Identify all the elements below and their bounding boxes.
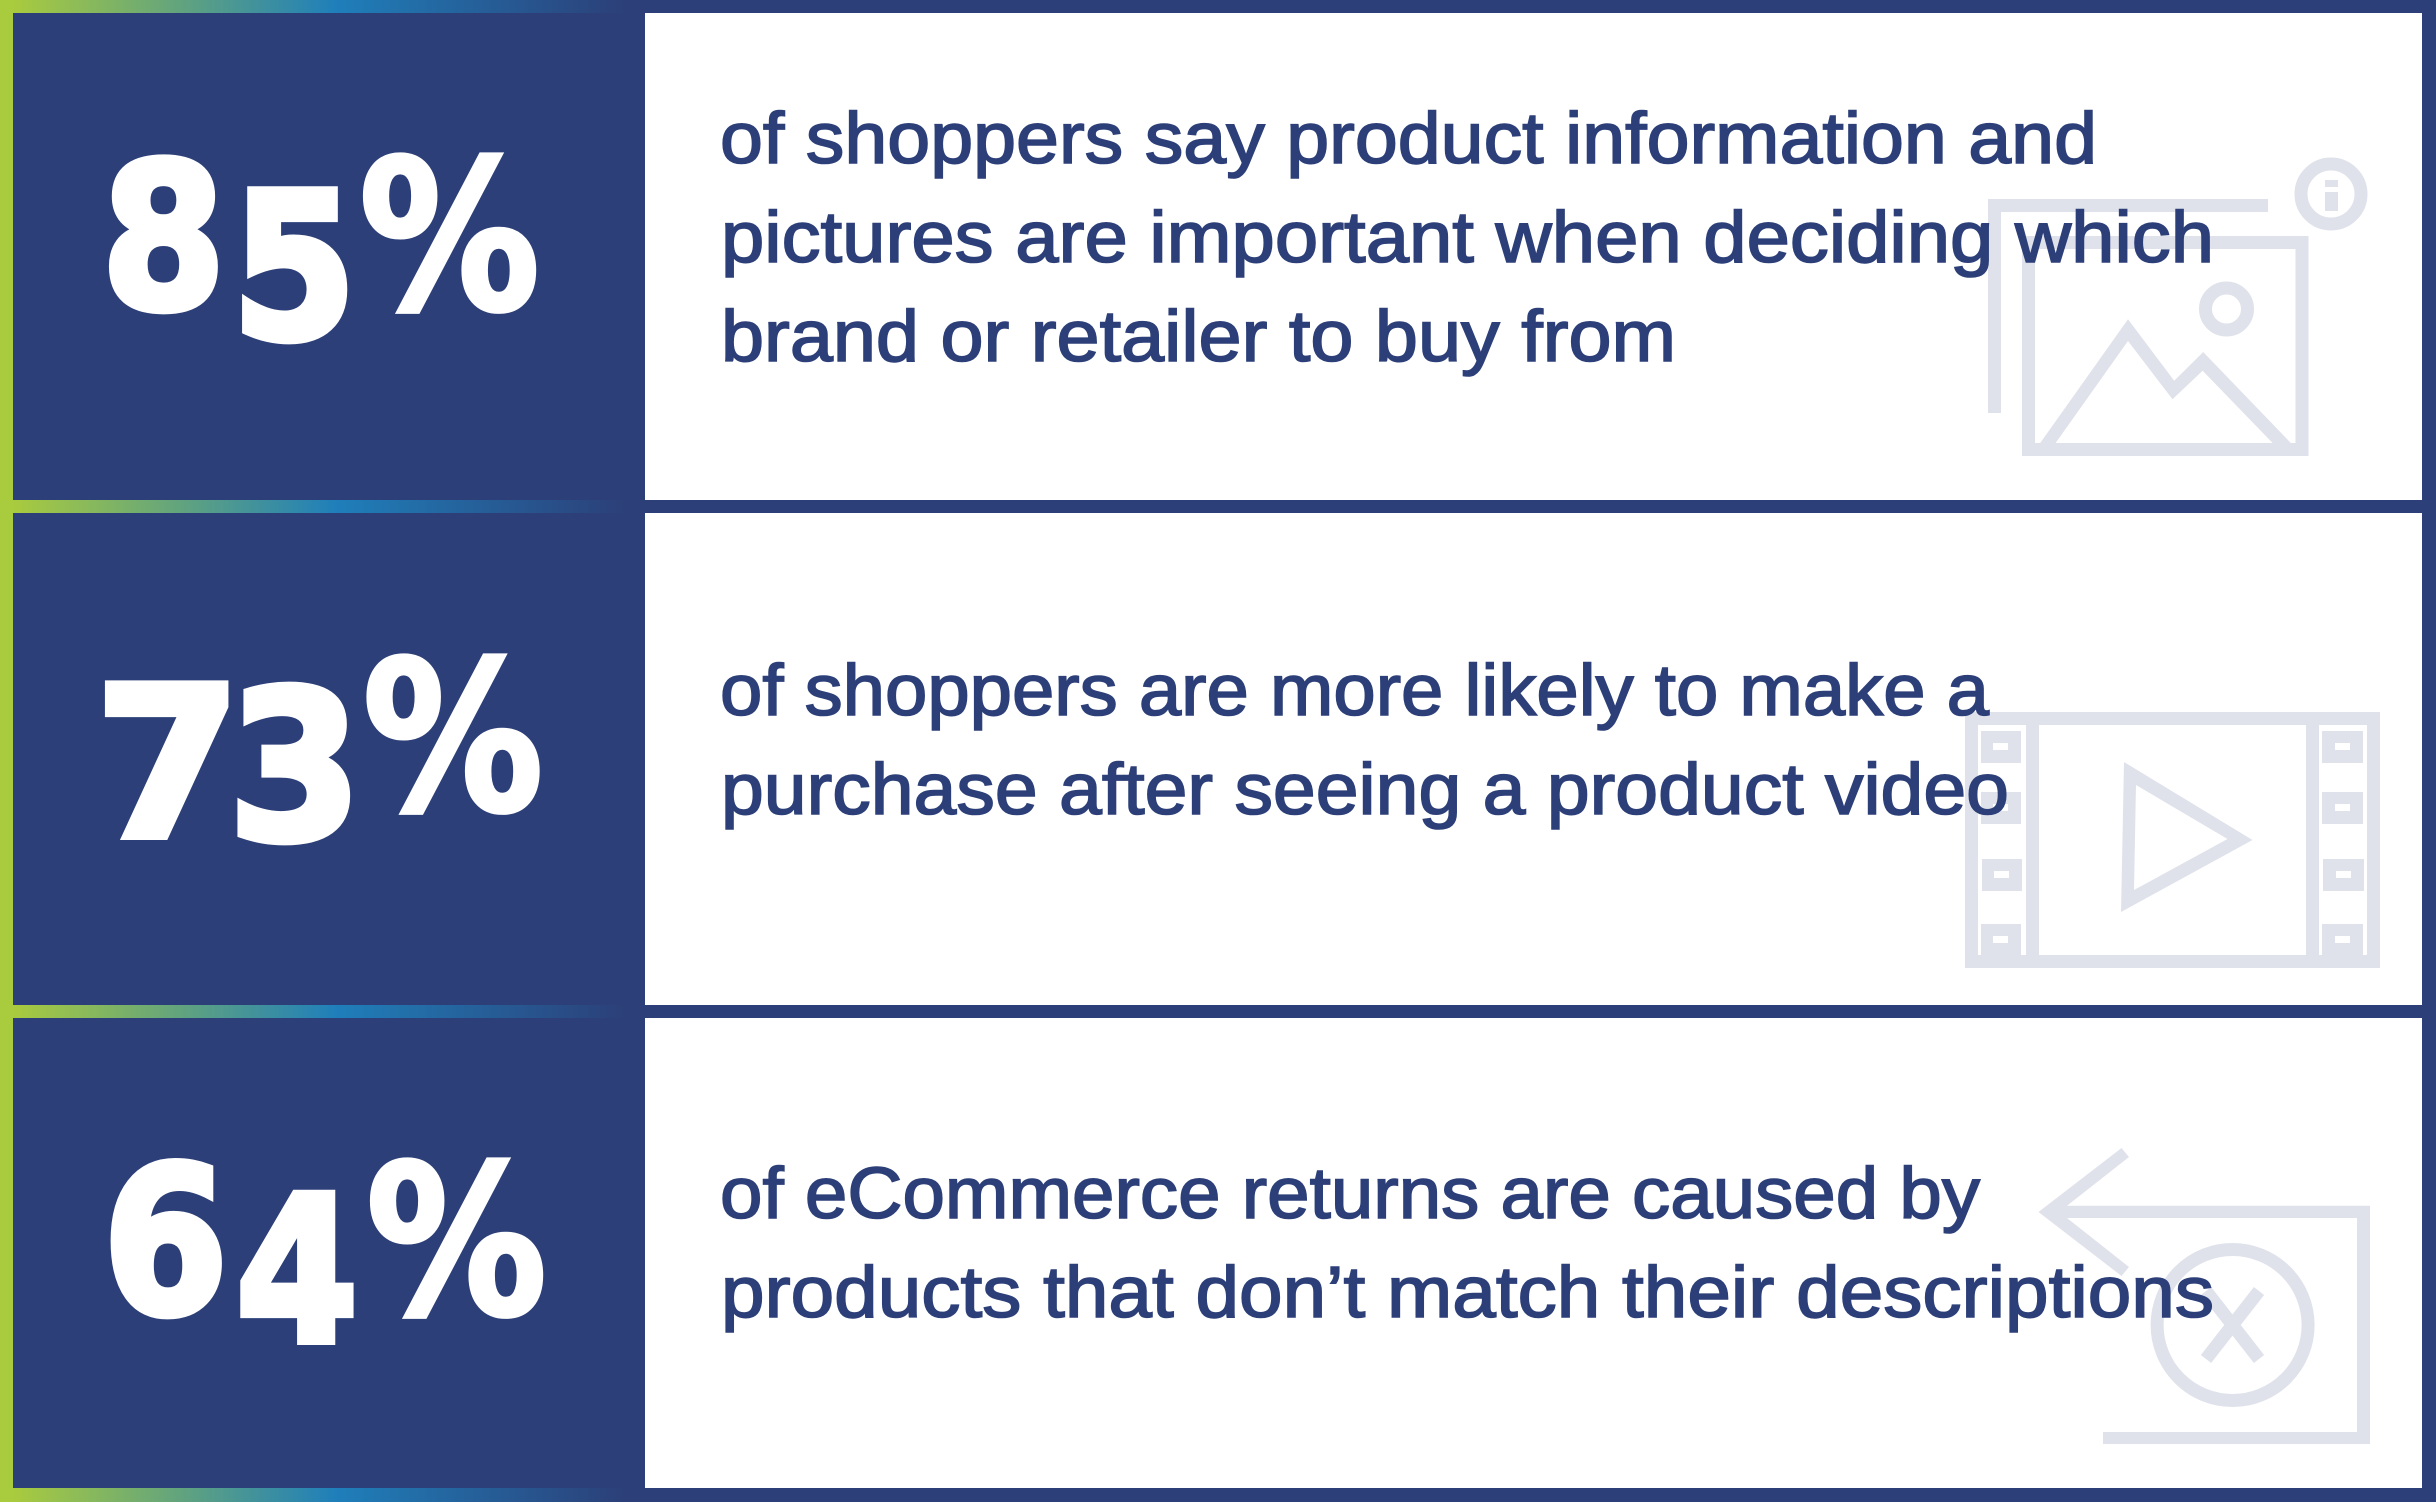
statistic: 73%: 7 <box>95 644 241 886</box>
text block: row 1 description: of shoppers say product information and <box>720 99 2097 179</box>
text block: row 2 description <box>720 651 2009 830</box>
statistic: 85%: 5 <box>232 150 356 385</box>
text block: row 2 description: of shoppers are more likely to make a <box>720 651 1990 731</box>
statistic: 73%: % <box>363 617 543 859</box>
text block: row 3 description: of eCommerce returns are caused by <box>720 1154 1980 1234</box>
icon: picture with info symbol <box>1988 164 2361 456</box>
text block: row 1 description: pictures are important when deciding which <box>721 198 2214 278</box>
icon: film strip with play button <box>1965 712 2380 968</box>
statistic: 85%: 8 <box>102 121 225 355</box>
statistic: 64%: 4 <box>236 1153 358 1389</box>
statistic: 85% <box>102 116 540 385</box>
statistic: 85%: % <box>359 116 540 358</box>
statistic: 73%: 3 <box>228 647 362 887</box>
icon: return arrow with cancel symbol <box>2038 1148 2370 1444</box>
statistic: 64%: % <box>366 1121 547 1363</box>
statistic: 73% <box>95 617 543 887</box>
text block: row 1 description <box>720 99 2214 377</box>
text block: row 2 description: purchase after seeing a product video <box>721 750 2009 830</box>
statistic: 64%: 6 <box>103 1125 228 1361</box>
text block: row 1 description: brand or retailer to buy from <box>721 297 1676 377</box>
text block: row 3 description: products that don’t match their descriptions <box>721 1253 2214 1333</box>
panel: row 2 text background <box>645 513 2422 1005</box>
panel: row 3 text background <box>645 1018 2422 1488</box>
panel: row 1 text background <box>645 13 2422 500</box>
statistic: 64% <box>103 1121 547 1389</box>
text block: row 3 description <box>720 1154 2214 1333</box>
